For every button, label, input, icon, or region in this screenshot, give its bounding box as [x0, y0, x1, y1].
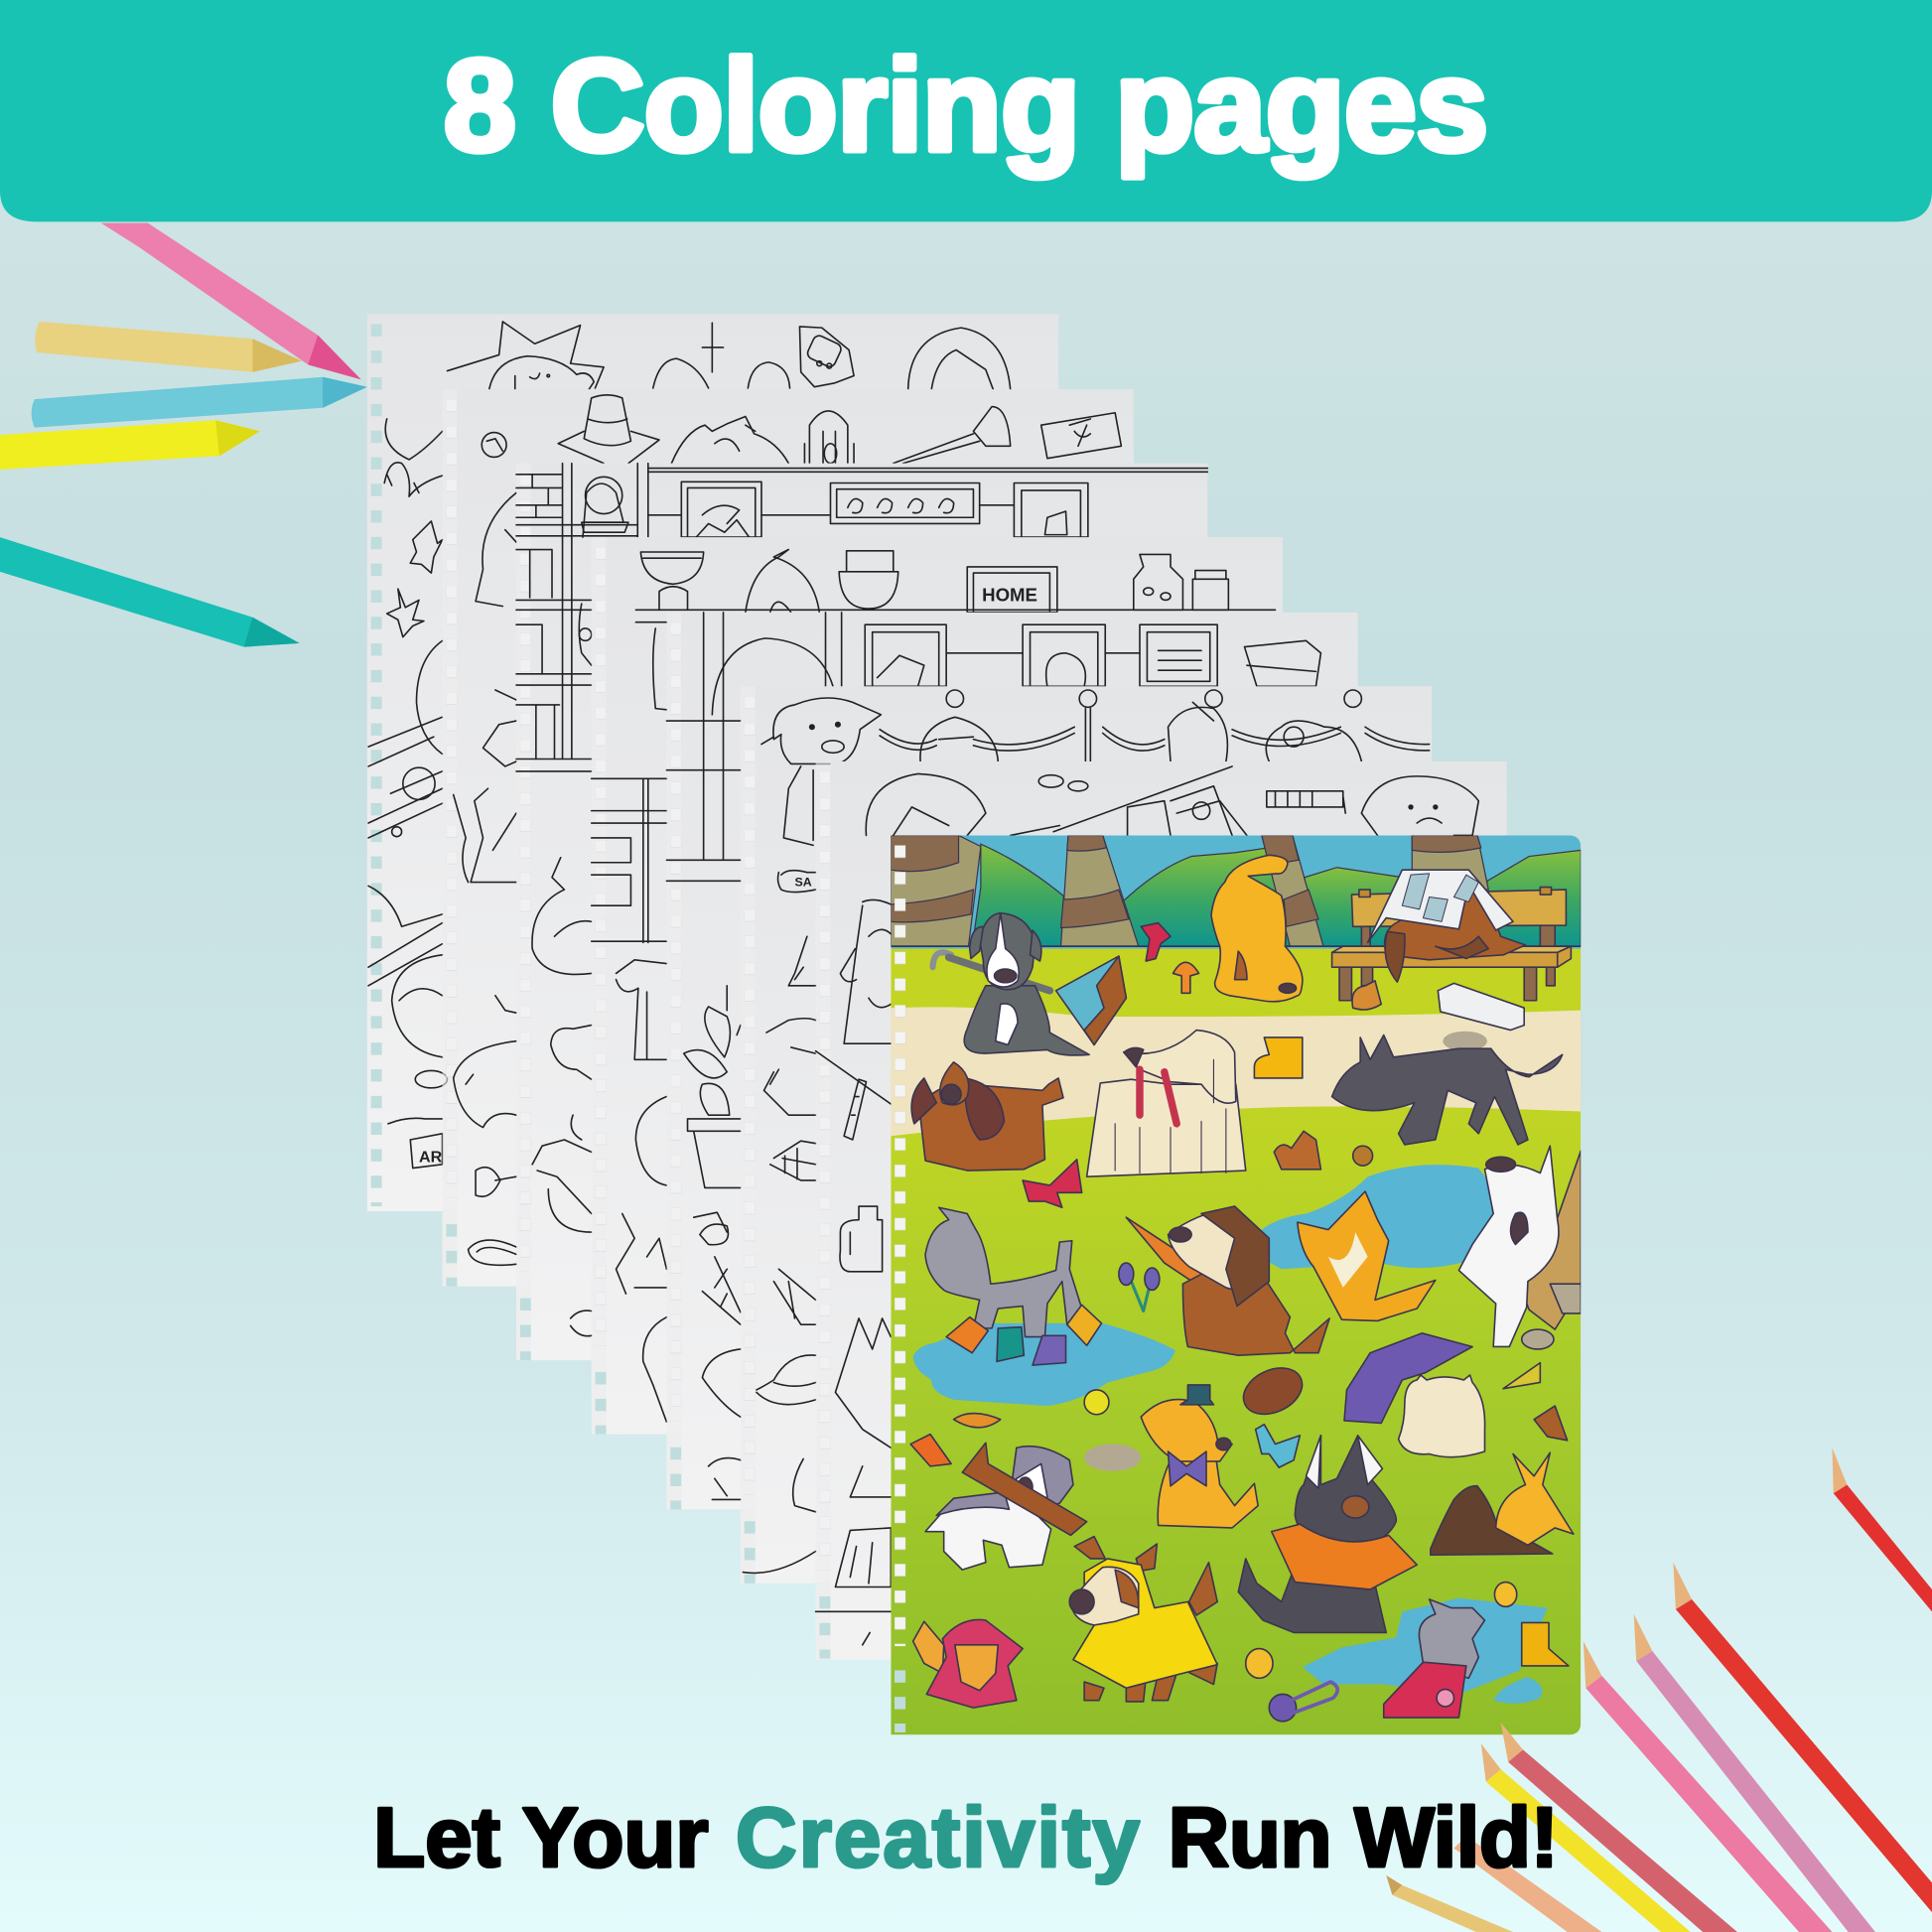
page 5: framed wall and plant [666, 613, 1358, 1509]
rock [1443, 1032, 1487, 1051]
page 6: bunting and dog: SA [794, 875, 812, 889]
pencil: lilac pink [1634, 1614, 1875, 1932]
coloured pencils [1386, 1448, 1932, 1932]
title: 8 Coloring pages [444, 32, 1488, 178]
puddle splash [1493, 1677, 1542, 1704]
blue butterfly [1256, 1425, 1300, 1467]
header banner [0, 0, 1932, 221]
rope ball toy [1269, 1682, 1337, 1722]
page 8: coloured dog park scene [891, 835, 1581, 1734]
cream pomeranian [1399, 1375, 1485, 1457]
blue pond [1261, 1165, 1493, 1269]
pencil: far red [1832, 1448, 1932, 1611]
page 6: bunting and dog [741, 686, 1432, 1584]
tree trunks [891, 835, 1488, 946]
sheet stack: line art pages [367, 314, 1507, 1660]
tagline [373, 1790, 1559, 1885]
tagline: creativity: Creativity [736, 1790, 1140, 1885]
grey pup in pink boot [1384, 1599, 1484, 1718]
pencil: pink [1584, 1641, 1832, 1932]
red bow [1023, 1160, 1082, 1207]
page 7: laundry line and dog [816, 761, 1507, 1660]
rock on grass [1084, 1445, 1141, 1471]
dark wolf [1332, 1035, 1563, 1145]
pencil: peach [1453, 1836, 1601, 1932]
dog in red hood [913, 1619, 1023, 1708]
pencil: dusty rose [1501, 1723, 1737, 1932]
yellow boot [1254, 1037, 1303, 1078]
spiral holes on coloured page [895, 845, 905, 1732]
page 4: kitchen shelf: HOME [982, 585, 1037, 606]
yellow boot and duck in puddle [1494, 1583, 1569, 1666]
football [1243, 1367, 1303, 1416]
tagline: run wild: Run Wild! [1169, 1790, 1559, 1885]
second puddle [1303, 1598, 1548, 1694]
tulips [1119, 1263, 1160, 1311]
page 1: space: AR [419, 1148, 443, 1166]
crayon: light blue [32, 377, 367, 428]
autumn leaves [910, 1363, 1568, 1466]
crayon: bright yellow [0, 420, 260, 470]
tagline: let your: Let Your [373, 1790, 709, 1885]
bench and sleeping dog with newspaper [1332, 870, 1571, 1001]
corgi [1298, 1191, 1436, 1320]
white and tan jumping dog [1458, 1146, 1581, 1346]
pencil: red [1673, 1563, 1932, 1912]
small yellow duck [1246, 1649, 1273, 1678]
dirt path [891, 1007, 1581, 1136]
crayon: pink [101, 223, 361, 379]
pencil: tan [1386, 1875, 1513, 1932]
squirrel and acorn [1274, 1131, 1373, 1170]
golden dog with top hat [1141, 1385, 1258, 1528]
page 1: space [367, 314, 1058, 1211]
tennis ball [1084, 1390, 1109, 1415]
purple umbrella [1344, 1333, 1472, 1423]
red and orange mushrooms [1141, 923, 1199, 993]
dog in yellow raincoat [1069, 1537, 1217, 1702]
black dog with orange cape [1238, 1436, 1417, 1632]
brown dog holding umbrella [1126, 1206, 1329, 1355]
rocks near white dog [1522, 1284, 1581, 1349]
pencil: yellow [1481, 1743, 1691, 1932]
page 3: shelves [516, 464, 1207, 1360]
grey schnauzer in boots [925, 1207, 1102, 1365]
bushes [972, 844, 1581, 946]
dirt mound and buried dog [1431, 1452, 1574, 1555]
crayon: teal [0, 537, 300, 647]
page 4: kitchen shelf [592, 537, 1283, 1435]
yellow dog digging [1211, 855, 1303, 1002]
brown spaniel [911, 1062, 1063, 1171]
puddle under schnauzer [913, 1323, 1175, 1406]
grey dog with umbrella [932, 913, 1126, 1055]
page 2: treats and dress dog [443, 389, 1134, 1287]
crayon: pale yellow [35, 322, 302, 372]
snail and rolled newspaper [1352, 981, 1524, 1031]
dog with log [925, 1443, 1087, 1570]
sky [891, 835, 1581, 949]
crayons group [0, 223, 367, 647]
afghan hound with rope [1087, 1031, 1246, 1176]
horizon line [891, 945, 1581, 947]
